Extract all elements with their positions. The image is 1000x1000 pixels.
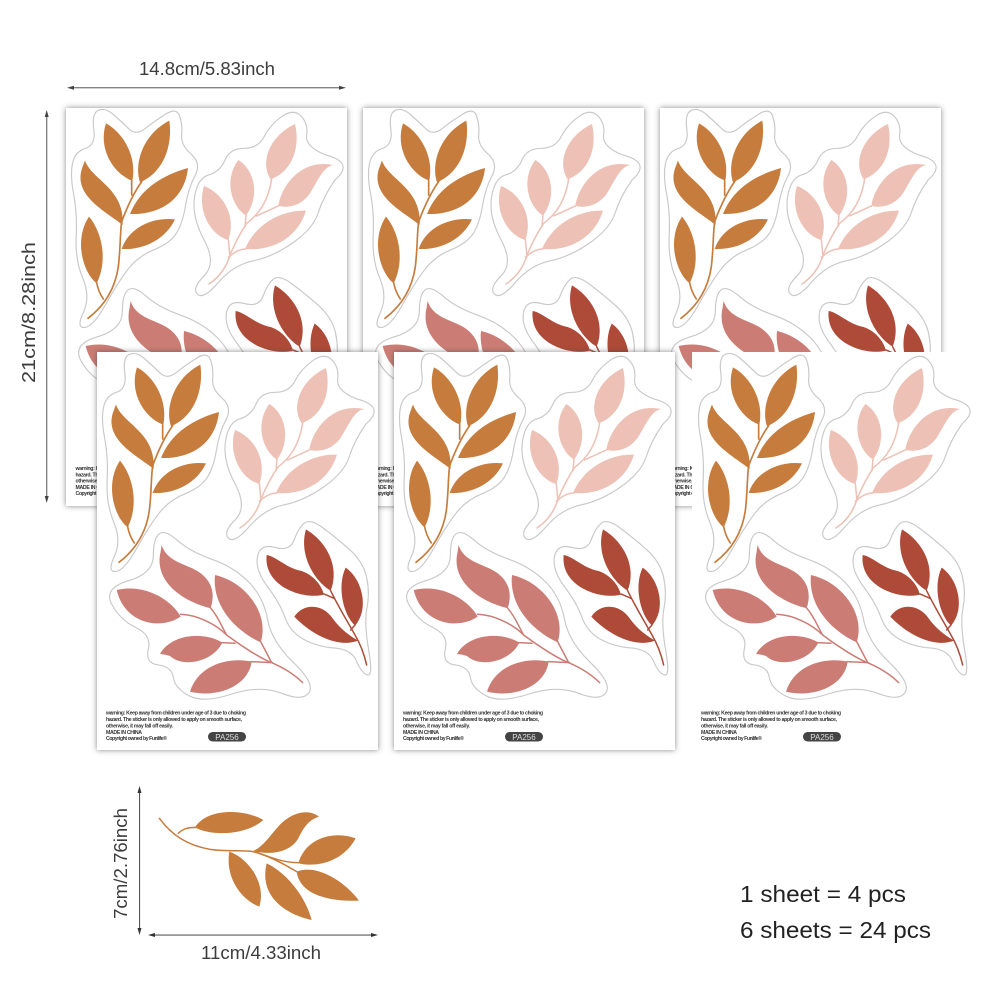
front sheet 2: [394, 352, 675, 750]
back sheet 3: otherwise, it may fall off easily.: [670, 478, 737, 484]
back sheet 2: warning: Keep away from children under age of 3 due to choking: [372, 466, 512, 472]
back sheet 3: MADE IN CHINA: [670, 485, 706, 491]
back sheet 2: otherwise, it may fall off easily.: [372, 478, 440, 484]
front sheet 2: hazard. The sticker is only allowed to apply on smooth surface,: [403, 717, 540, 723]
back sheet 3: Copyright owned by Funlife®: [670, 490, 731, 497]
front sheet 1: MADE IN CHINA: [106, 730, 142, 736]
front sheet 3: Copyright owned by Funlife®: [701, 735, 762, 742]
front sheet 3: hazard. The sticker is only allowed to apply on smooth surface,: [701, 717, 838, 723]
back sheet 3: warning: Keep away from children under age of 3 due to choking: [668, 466, 810, 472]
front sheet 3: warning: Keep away from children under age of 3 due to choking: [700, 710, 841, 716]
front sheet 2: PA256: [512, 733, 536, 742]
front sheet 2: warning: Keep away from children under age of 3 due to choking: [402, 710, 543, 716]
single orange leaf sticker: [159, 812, 359, 920]
front sheet 1: hazard. The sticker is only allowed to apply on smooth surface,: [106, 717, 243, 723]
height label: 21cm/8.28inch: [19, 242, 39, 383]
back sheet 1: hazard. The sticker is only allowed to apply on smooth surface,: [76, 472, 212, 478]
back sheet 1: otherwise, it may fall off easily.: [76, 478, 143, 484]
front sheet 2: MADE IN CHINA: [403, 730, 439, 736]
front sheet 1: warning: Keep away from children under age of 3 due to choking: [105, 710, 246, 716]
width dimension arrow: [67, 86, 346, 90]
back sheet 3: hazard. The sticker is only allowed to apply on smooth surface,: [670, 472, 806, 478]
sticker width arrow: [148, 933, 378, 937]
front sheet 1: otherwise, it may fall off easily.: [106, 724, 174, 730]
back sheet 1: [66, 108, 347, 506]
width label: 14.8cm/5.83inch: [139, 59, 275, 79]
back sheet 1: warning: Keep away from children under age of 3 due to choking: [74, 466, 216, 472]
front sheet 3: MADE IN CHINA: [701, 730, 737, 736]
front sheet 2: otherwise, it may fall off easily.: [403, 724, 471, 730]
back sheet 2: Copyright owned by Funlife®: [372, 490, 434, 497]
back sheet 2: [363, 108, 644, 506]
back sheet 1: MADE IN CHINA: [76, 485, 112, 491]
quantity note line 1: 1 sheet = 4 pcs: [740, 881, 906, 907]
front sheet 3: otherwise, it may fall off easily.: [701, 724, 769, 730]
sticker height arrow: [138, 786, 142, 935]
back sheet 3: [660, 108, 941, 506]
front sheet 2: Copyright owned by Funlife®: [403, 735, 464, 742]
sticker height label: 7cm/2.76inch: [111, 808, 131, 919]
front sheet 1: [97, 352, 378, 750]
back sheet 2: MADE IN CHINA: [372, 485, 409, 491]
front sheet 1: Copyright owned by Funlife®: [106, 735, 167, 742]
back sheet 1: Copyright owned by Funlife®: [76, 490, 137, 497]
quantity note line 2: 6 sheets = 24 pcs: [740, 917, 931, 943]
front sheet 3: PA256: [810, 733, 834, 742]
back sheet 2: hazard. The sticker is only allowed to apply on smooth surface,: [372, 472, 509, 478]
front sheet 3: [692, 352, 982, 762]
front sheet 1: PA256: [215, 733, 239, 742]
height dimension arrow: [45, 110, 49, 503]
sticker width label: 11cm/4.33inch: [201, 943, 321, 963]
